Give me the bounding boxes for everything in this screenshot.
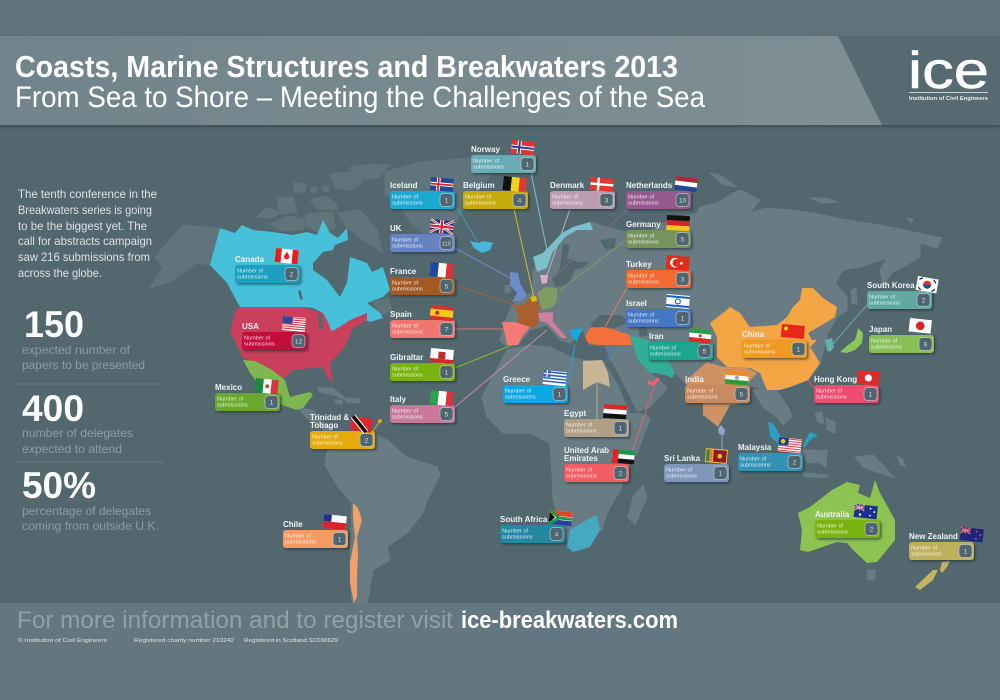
callout: Egypt: 1: [619, 426, 623, 432]
country: Mexico: [243, 360, 313, 410]
stat: 400 delegates: expected to attend: [22, 442, 122, 456]
stat: 150 papers: papers to be presented: [22, 358, 145, 372]
flag: Iran: [689, 328, 712, 344]
callout: Trinidad and Tobago: Number of: [312, 435, 339, 441]
country: Canada: [210, 220, 390, 332]
flag: China: [781, 324, 805, 339]
callout: Malaysia: Malaysia: [738, 443, 772, 452]
callout: New Zealand: [909, 527, 984, 560]
callout: Germany: [626, 215, 691, 248]
callout: Iceland: [390, 177, 455, 209]
callout: Sri Lanka: 1: [719, 470, 723, 478]
callout: Belgium: 4: [518, 198, 522, 204]
world map: [150, 158, 950, 605]
callout: Egypt: submissions: [566, 429, 597, 435]
flag: Trinidad and Tobago: [350, 416, 373, 433]
callout: Hong Kong: [814, 370, 880, 403]
top strip: [0, 0, 1000, 37]
callout: South Korea: 2: [922, 298, 926, 304]
country: UK: [510, 272, 527, 302]
callout: Netherlands: submissions: [628, 201, 659, 207]
callout: South Korea: Number of: [869, 295, 896, 301]
callout: Gibraltar: submissions: [392, 373, 423, 379]
callout: Hong Kong: 1: [869, 392, 873, 398]
callout: Germany: Germany: [626, 220, 661, 229]
callout: Netherlands: [626, 176, 698, 209]
great lakes: [318, 314, 323, 330]
callout: Turkey: 3: [681, 276, 685, 284]
country: Sri Lanka: [718, 425, 725, 435]
callout: Spain: 7: [445, 326, 449, 334]
stat: 50% overseas: percentage of delegates: [22, 504, 151, 518]
callout: Malaysia: [738, 437, 803, 471]
callout: United Arab Emirates: 2: [619, 470, 623, 478]
callout: USA: Number of: [244, 336, 271, 342]
callout: USA: [242, 316, 307, 350]
callout: South Africa: Number of: [502, 529, 529, 535]
callout: South Korea: [867, 276, 939, 309]
country: Australia: [798, 480, 895, 563]
flag: Spain: [430, 305, 454, 321]
callout: France: France: [390, 267, 417, 276]
intro text: Breakwaters series is going: [18, 203, 152, 217]
callout: Sri Lanka: Number of: [666, 468, 693, 474]
callout: France: submissions: [392, 287, 423, 293]
callout: Trinidad and Tobago: 2: [365, 438, 369, 444]
callout: India: 5: [740, 392, 744, 398]
callout: France: [390, 262, 455, 295]
callout: South Africa: submissions: [502, 535, 533, 541]
country: Greece: [570, 328, 583, 342]
callout: Turkey: Number of: [628, 274, 655, 280]
country: USA: [230, 307, 367, 383]
callout: Denmark: [550, 177, 615, 209]
callout: New Zealand: Number of: [911, 546, 938, 552]
callout: Trinidad and Tobago: submissions: [312, 441, 343, 447]
callout: Sri Lanka: Sri Lanka: [664, 454, 701, 463]
callout: Iceland: Number of: [392, 195, 419, 201]
flag: Malaysia: [778, 437, 802, 453]
title: [15, 49, 705, 114]
flag: Egypt: [603, 404, 627, 419]
callout: South Africa: [500, 510, 573, 543]
stat: 400 delegates: number of delegates: [22, 426, 133, 440]
title: Coasts, Marine Structures and Breakwaters 2013: [15, 49, 678, 84]
callout: Israel: Israel: [626, 299, 647, 308]
callout: Netherlands: 10: [679, 198, 686, 204]
callout: Italy: 5: [445, 412, 449, 418]
footer text: [17, 607, 678, 644]
flag: Italy: [430, 390, 454, 406]
flag: Chile: [323, 514, 347, 530]
flag: UAE: [612, 449, 635, 464]
callout: Malaysia: submissions: [740, 463, 771, 469]
footer text: ice-breakwaters.com: [461, 607, 678, 634]
header band: [0, 36, 1000, 125]
flag: Japan: [909, 318, 932, 334]
callout: Canada: [235, 248, 300, 283]
country: Germany: [537, 287, 557, 310]
callout: Sri Lanka: [664, 448, 729, 482]
stat: 50% overseas: 50%: [22, 465, 96, 506]
callout: China: 1: [797, 346, 801, 354]
footer text: © Institution of Civil Engineers: [18, 637, 107, 644]
logo: ICE: Institution of Civil Engineers: [909, 96, 988, 102]
callout: Iran: Iran: [649, 332, 664, 341]
callout: New Zealand: 1: [964, 548, 968, 556]
country: Egypt: [583, 360, 610, 390]
intro text: The tenth conference in the: [18, 187, 157, 201]
flag: Canada: [275, 248, 299, 264]
footer text: For more information and to register visit: [17, 607, 453, 634]
flag: Mexico: [255, 378, 279, 394]
callout: Iceland: Iceland: [390, 181, 418, 190]
footer text: Registered charity number 210242: [134, 638, 234, 644]
lakes: [298, 290, 303, 300]
callout: Australia: [815, 504, 880, 538]
callout: Hong Kong: Number of: [816, 389, 843, 395]
footer band: [0, 603, 1000, 700]
country: Denmark: [540, 275, 548, 284]
callout: Netherlands: Netherlands: [626, 181, 673, 190]
callout: South Korea: South Korea: [867, 281, 915, 290]
country: UAE: [647, 377, 660, 386]
callout: Trinidad and Tobago: Trinidad &: [310, 413, 349, 422]
callout: Gibraltar: [390, 348, 455, 381]
country: Iran: [630, 335, 675, 378]
callout: Iran: [648, 328, 713, 360]
callout: Denmark: submissions: [552, 201, 583, 207]
flag: Israel: [666, 294, 690, 309]
callout: United Arab Emirates: Number of: [566, 468, 593, 474]
callout: South Africa: 4: [555, 532, 559, 538]
callout: Denmark: Denmark: [550, 181, 585, 190]
stat: 50% overseas: coming from outside U.K.: [22, 519, 159, 533]
callout: Norway: [471, 140, 536, 173]
callout: Hong Kong: submissions: [816, 395, 847, 401]
callout: Egypt: Egypt: [564, 409, 587, 418]
callout: New Zealand: New Zealand: [909, 532, 958, 541]
country: Japan: [840, 328, 863, 353]
callout: Norway: Norway: [471, 145, 500, 154]
stat: 150 papers: 150: [24, 304, 84, 345]
callout: Gibraltar: Number of: [392, 367, 419, 373]
callout: Trinidad and Tobago: [310, 413, 375, 449]
callout: Israel: Number of: [628, 313, 655, 319]
footer text: Registered in Scotland SC038629: [244, 638, 338, 644]
callout: Trinidad and Tobago: Tobago: [310, 421, 338, 430]
connector lines: [373, 173, 867, 464]
callout: Italy: submissions: [392, 415, 423, 421]
callout: Japan: Japan: [869, 325, 892, 334]
callout: China: submissions: [744, 350, 775, 356]
title: From Sea to Shore – Meeting the Challenges of the Sea: [15, 81, 705, 114]
callout: Turkey: submissions: [628, 280, 659, 286]
callout: Belgium: Number of: [465, 195, 492, 201]
callout: Australia: Australia: [815, 510, 850, 519]
country: Norway: [533, 222, 593, 272]
country: Netherlands: [535, 290, 542, 297]
callout: Norway: Number of: [473, 159, 500, 165]
logo: ICE: ice: [908, 42, 989, 100]
callout: Germany: 5: [681, 236, 685, 244]
callout: India: India: [685, 375, 704, 384]
callout: Chile: submissions: [285, 540, 316, 546]
callout: Turkey: [626, 255, 691, 288]
callout: Chile: Number of: [285, 534, 312, 540]
flag: Sri Lanka: [705, 448, 728, 464]
flag: New Zealand: [960, 527, 984, 542]
callout: Italy: Italy: [390, 395, 407, 404]
callout: China: [742, 324, 807, 358]
country: Malaysia: [768, 422, 818, 448]
callout: UK: submissions: [392, 244, 423, 250]
callout: India: Number of: [687, 389, 714, 395]
flag: France: [430, 262, 454, 278]
callout: USA: 12: [295, 338, 302, 346]
country: Chile: [350, 503, 362, 603]
flag: UK: [430, 219, 454, 234]
callout: Denmark: 3: [605, 198, 609, 204]
stat: 400 delegates: 400: [22, 388, 84, 429]
callout: Greece: submissions: [505, 395, 536, 401]
callout: Japan: submissions: [871, 345, 902, 351]
intro text: saw 216 submissions from: [18, 250, 150, 264]
callout: South Africa: South Africa: [500, 515, 548, 524]
callout: Norway: submissions: [473, 165, 504, 171]
callout: Gibraltar: 1: [445, 370, 449, 376]
callout: Malaysia: 2: [793, 460, 797, 466]
callout: Hong Kong: Hong Kong: [814, 375, 857, 384]
callout: Canada: submissions: [237, 275, 268, 281]
callout: UK: Number of: [392, 238, 419, 244]
callout: UK: 115: [442, 242, 451, 248]
callout: Greece: [503, 370, 568, 403]
callout: Spain: [390, 305, 455, 338]
callout: China: China: [742, 330, 765, 339]
callout: Japan: Number of: [871, 339, 898, 345]
stat: 400 delegates: [22, 388, 133, 456]
callout: Belgium: Belgium: [463, 181, 495, 190]
flag: Iceland: [430, 177, 454, 192]
country: New Zealand: [915, 561, 950, 590]
callout: New Zealand: submissions: [911, 552, 942, 558]
callout: Italy: [390, 390, 455, 423]
callout: Sri Lanka: submissions: [666, 474, 697, 480]
stat: 150 papers: [22, 304, 145, 372]
flag: Turkey: [666, 255, 690, 271]
country: Iceland: [470, 241, 493, 253]
intro text: to be the biggest yet. The: [18, 219, 147, 233]
callout: Greece: Number of: [505, 389, 532, 395]
flag: Norway: [511, 140, 535, 155]
callout: Australia: 2: [870, 526, 874, 534]
intro text: [18, 187, 157, 280]
callout: India: [685, 370, 750, 403]
callout: Gibraltar: Gibraltar: [390, 353, 423, 362]
callout: Greece: Greece: [503, 375, 531, 384]
callout: Mexico: 1: [270, 400, 274, 406]
callout: Greece: 1: [558, 392, 562, 398]
flag: Australia: [854, 504, 878, 519]
flag: Hong Kong: [857, 370, 880, 386]
flag: South Korea: [916, 276, 939, 293]
flag: Netherlands: [674, 176, 698, 192]
callout: Mexico: submissions: [217, 403, 248, 409]
flag: India: [725, 370, 749, 386]
flag: South Africa: [549, 510, 573, 526]
callout: Japan: 9: [924, 342, 928, 348]
callout: Italy: Number of: [392, 409, 419, 415]
callout: France: 5: [445, 284, 449, 290]
callout: Mexico: Mexico: [215, 383, 242, 392]
callout: Israel: submissions: [628, 319, 659, 325]
callout: Chile: 1: [338, 536, 342, 544]
stat: 50% overseas: [22, 465, 159, 533]
pin: Trinidad and Tobago: [378, 419, 382, 423]
flag: Denmark: [590, 177, 614, 192]
callout: China: Number of: [744, 344, 771, 350]
callout: Belgium: submissions: [465, 201, 496, 207]
callout: Israel: 1: [681, 316, 685, 322]
callout: Mexico: [215, 378, 280, 411]
callout: USA: USA: [242, 322, 259, 331]
stat: 150 papers: expected number of: [22, 343, 131, 357]
callout: India: submissions: [687, 395, 718, 401]
callout: Australia: submissions: [817, 530, 848, 536]
country: Spain: [502, 322, 530, 345]
callout: UK: [390, 219, 455, 252]
country: Turkey: [585, 327, 632, 345]
callout: UK: UK: [390, 224, 402, 233]
country: Belgium: [530, 296, 537, 302]
callout: Canada: Number of: [237, 269, 264, 275]
flag: Germany: [666, 215, 690, 231]
callout: Norway: 1: [526, 162, 530, 168]
callout: Mexico: Number of: [217, 397, 244, 403]
callout: Japan: [869, 318, 934, 353]
intro text: call for abstracts campaign: [18, 234, 152, 248]
flag: Greece: [543, 370, 567, 386]
flag: Belgium: [503, 176, 527, 192]
callout: Chile: Chile: [283, 520, 303, 529]
intro text: across the globe.: [18, 266, 102, 280]
callout: Australia: Number of: [817, 524, 844, 530]
callout: Iran: 5: [703, 348, 707, 356]
callout: United Arab Emirates: United Arab: [564, 446, 609, 455]
callout: Israel: [626, 294, 691, 327]
callout: Denmark: Number of: [552, 195, 579, 201]
callout: Iceland: submissions: [392, 201, 423, 207]
callout: South Korea: submissions: [869, 301, 900, 307]
callout: Iran: Number of: [650, 346, 677, 352]
callout: Chile: [283, 514, 348, 548]
callout: Iceland: 1: [445, 198, 449, 204]
callout: Netherlands: Number of: [628, 195, 655, 201]
callout: Canada: Canada: [235, 255, 264, 264]
country: Italy: [538, 312, 567, 338]
country: France: [513, 298, 540, 327]
callout: Spain: submissions: [392, 330, 423, 336]
callout: USA: submissions: [244, 342, 275, 348]
callout: Egypt: [564, 404, 629, 437]
callout: Canada: 2: [290, 272, 294, 278]
callout: United Arab Emirates: submissions: [566, 474, 597, 480]
land: grey continents: [150, 158, 942, 605]
flag: USA: [282, 316, 306, 332]
callout: France: Number of: [392, 281, 419, 287]
callout: United Arab Emirates: [564, 446, 635, 482]
callout: United Arab Emirates: Emirates: [564, 454, 598, 463]
flag: Gibraltar: [430, 348, 454, 364]
callout: Spain: Spain: [390, 310, 412, 319]
callout: Turkey: Turkey: [626, 260, 652, 269]
callout: Iran: submissions: [650, 352, 681, 358]
country: China: [710, 288, 837, 390]
callout: Spain: Number of: [392, 324, 419, 330]
callout: Germany: submissions: [628, 240, 659, 246]
country: South Korea: [825, 338, 834, 352]
callout: Egypt: Number of: [566, 423, 593, 429]
country: South Africa: [567, 515, 600, 552]
callout: Germany: Number of: [628, 234, 655, 240]
callout: Belgium: [463, 176, 528, 209]
country: India: [685, 362, 757, 427]
callout: Malaysia: Number of: [740, 457, 767, 463]
